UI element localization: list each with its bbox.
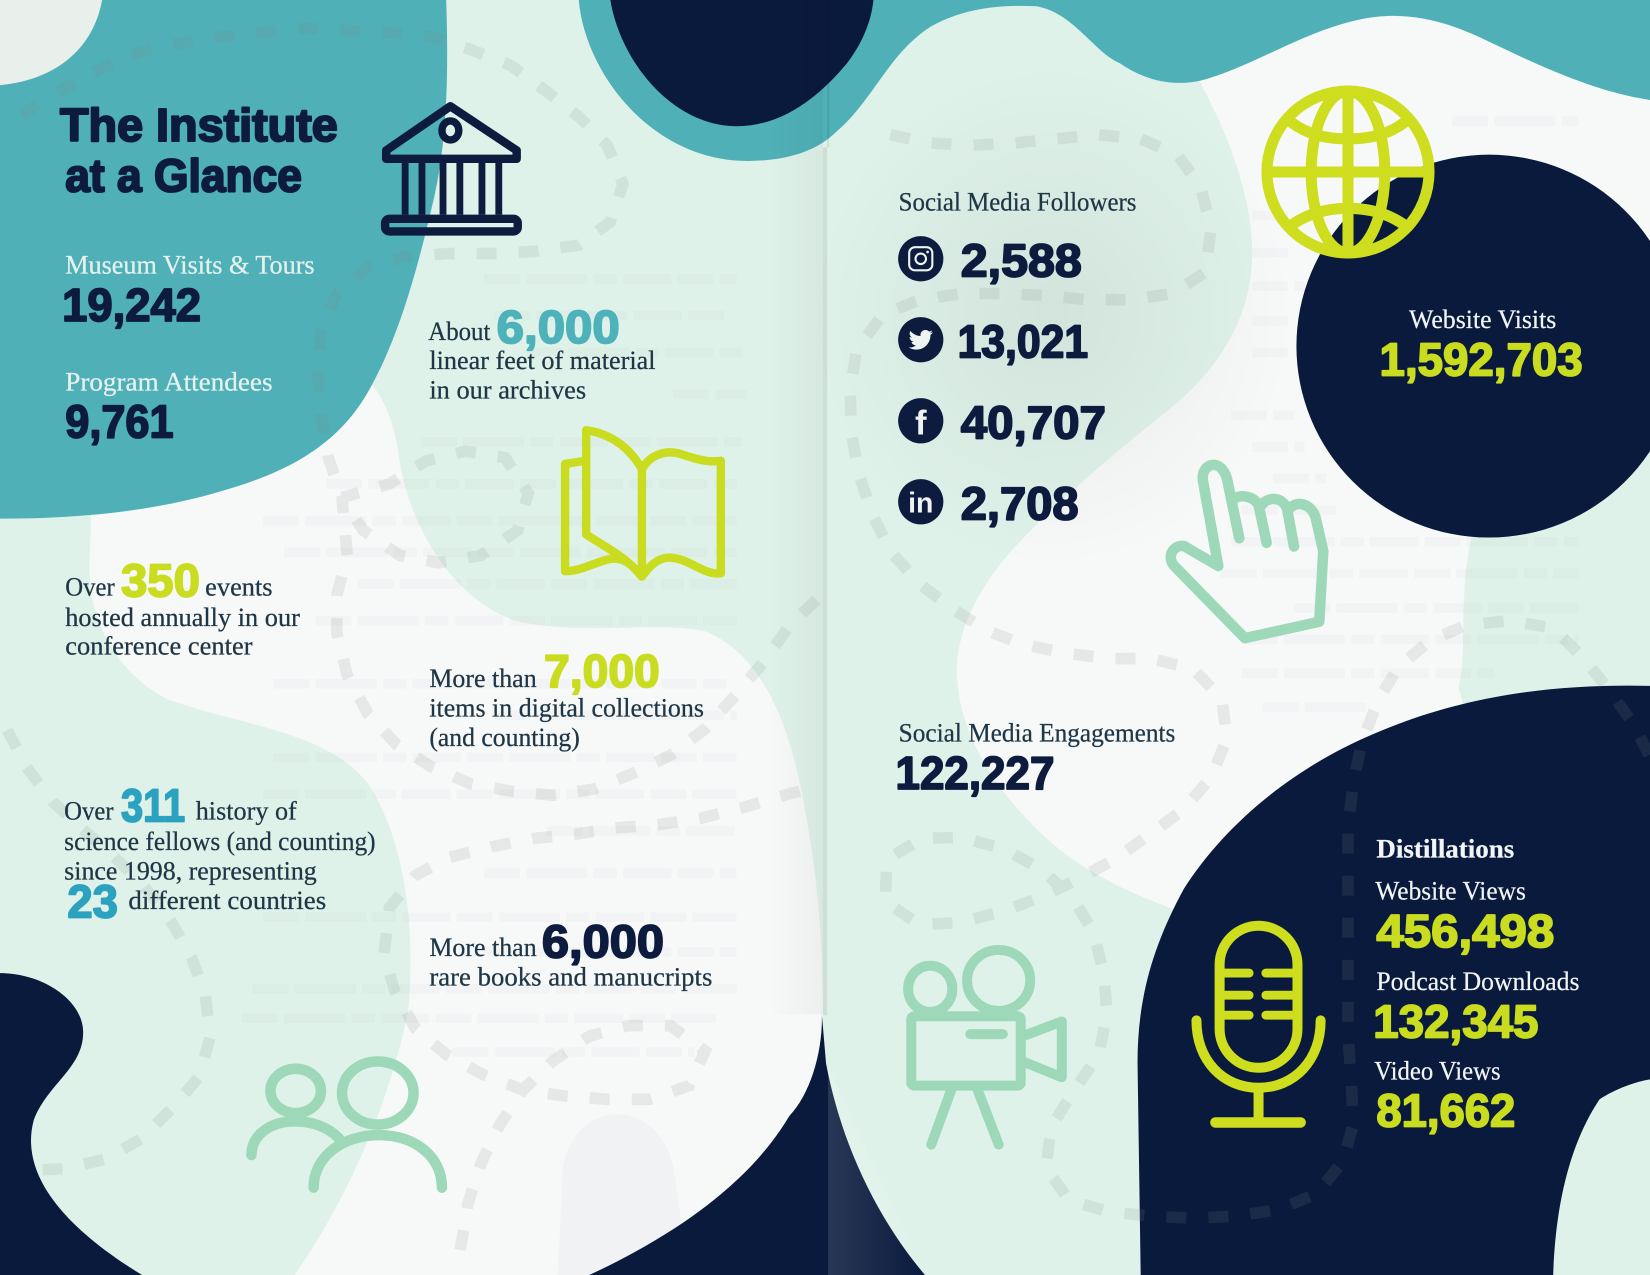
stat: digital collections: (and counting) bbox=[429, 723, 580, 752]
stat: fellows: since 1998, representing bbox=[64, 856, 317, 885]
stat: digital collections: items in digital collections bbox=[429, 693, 704, 722]
distillations panel: Distillations bbox=[1376, 834, 1514, 863]
stat: fellows: history of bbox=[196, 796, 297, 825]
stat: program attendees: Program Attendees bbox=[65, 367, 273, 396]
stat: events: Over bbox=[65, 572, 115, 601]
stat: rare books bbox=[429, 915, 712, 992]
stat: fellows: Over bbox=[64, 796, 114, 825]
stat: linear feet: About bbox=[428, 317, 491, 346]
stat: linear feet: in our archives bbox=[429, 376, 586, 405]
gutter shading bbox=[768, 0, 925, 1275]
stat: program attendees: 9,761 bbox=[65, 396, 174, 448]
stat: rare books: 6,000 bbox=[542, 915, 664, 967]
stat: museum visits bbox=[62, 251, 315, 331]
title bbox=[60, 99, 338, 201]
blob: corner patch bbox=[0, 0, 102, 85]
blob: teal top band and ring bbox=[579, 0, 1650, 161]
icon: people bbox=[251, 1061, 442, 1188]
stat: linear feet: 6,000 bbox=[497, 301, 620, 353]
stat: rare books: More than bbox=[429, 933, 537, 962]
stat: events: 350 bbox=[121, 554, 200, 606]
blob: navy bottom-right panel bbox=[1138, 686, 1650, 1275]
stat: linkedin bbox=[898, 478, 1079, 530]
stat: social media engagements bbox=[896, 719, 1175, 799]
icon: pointing hand bbox=[1171, 465, 1323, 638]
icon: film camera bbox=[908, 950, 1062, 1145]
stat: linear feet bbox=[428, 301, 656, 405]
distillations panel: 456,498 bbox=[1376, 905, 1554, 957]
stat: program attendees bbox=[65, 367, 273, 448]
icon: museum building bbox=[385, 106, 518, 231]
stat: facebook bbox=[898, 397, 1106, 449]
stat: linkedin: 2,708 bbox=[961, 478, 1079, 530]
stat: fellows bbox=[64, 780, 376, 927]
distillations panel: Podcast Downloads bbox=[1376, 967, 1579, 996]
stat: linear feet: linear feet of material bbox=[429, 346, 656, 375]
stat: website visits bbox=[1380, 305, 1583, 386]
soft scan shadow bbox=[810, 63, 1294, 568]
stat: social media engagements: Social Media Engagements bbox=[899, 719, 1175, 748]
stat: events: conference center bbox=[65, 631, 253, 660]
stat: digital collections: 7,000 bbox=[544, 645, 660, 697]
stat: instagram: 2,588 bbox=[961, 235, 1082, 287]
stat: rare books: rare books and manucripts bbox=[429, 963, 712, 992]
title: The Institute bbox=[60, 99, 338, 151]
stat: fellows: different countries bbox=[128, 886, 326, 915]
icon: open book bbox=[565, 430, 721, 576]
stat: social media engagements: 122,227 bbox=[896, 747, 1054, 799]
blob: white left page bbox=[89, 368, 823, 1275]
stat: digital collections: More than bbox=[429, 664, 537, 693]
distillations panel: Website Views bbox=[1375, 876, 1526, 905]
icon: microphone bbox=[1196, 926, 1321, 1122]
stat: twitter: 13,021 bbox=[958, 316, 1088, 368]
distillations panel: 81,662 bbox=[1376, 1085, 1515, 1137]
icon: globe bbox=[1267, 91, 1429, 253]
blob: teal left panel bbox=[0, 0, 447, 519]
blob: white right page bbox=[957, 0, 1650, 915]
distillations panel: 132,345 bbox=[1373, 995, 1538, 1047]
stat: instagram bbox=[898, 235, 1082, 287]
stat: museum visits: 19,242 bbox=[62, 279, 201, 331]
stat: fellows: 311 bbox=[121, 780, 185, 832]
distillations panel: Video Views bbox=[1374, 1056, 1501, 1085]
stat: twitter bbox=[898, 316, 1088, 368]
faint show-through shape bbox=[558, 1114, 689, 1275]
stat: fellows: 23 bbox=[67, 875, 118, 927]
stat: events bbox=[65, 554, 300, 660]
stat: linkedin: in bbox=[908, 487, 933, 519]
stat: facebook: f bbox=[915, 404, 927, 442]
blob: navy bottom-left bbox=[0, 973, 142, 1275]
stat: fellows: science fellows (and counting) bbox=[64, 827, 376, 856]
stat: digital collections bbox=[429, 645, 704, 752]
stat: website visits: 1,592,703 bbox=[1380, 334, 1583, 386]
blob: navy top-right circle bbox=[1296, 155, 1650, 538]
stat: facebook: 40,707 bbox=[961, 397, 1106, 449]
title: at a Glance bbox=[65, 149, 302, 201]
stat: events: events bbox=[205, 572, 273, 601]
stat: website visits: Website Visits bbox=[1409, 305, 1556, 334]
stat: museum visits: Museum Visits & Tours bbox=[65, 251, 315, 280]
blob: navy bottom centre bbox=[589, 1014, 925, 1275]
distillations panel bbox=[1373, 834, 1579, 1137]
stat: events: hosted annually in our bbox=[65, 603, 300, 632]
faint show-through text bars bbox=[242, 121, 1578, 1052]
social media followers heading: Social Media Followers bbox=[899, 187, 1136, 216]
blob: navy top circle bbox=[610, 0, 873, 126]
